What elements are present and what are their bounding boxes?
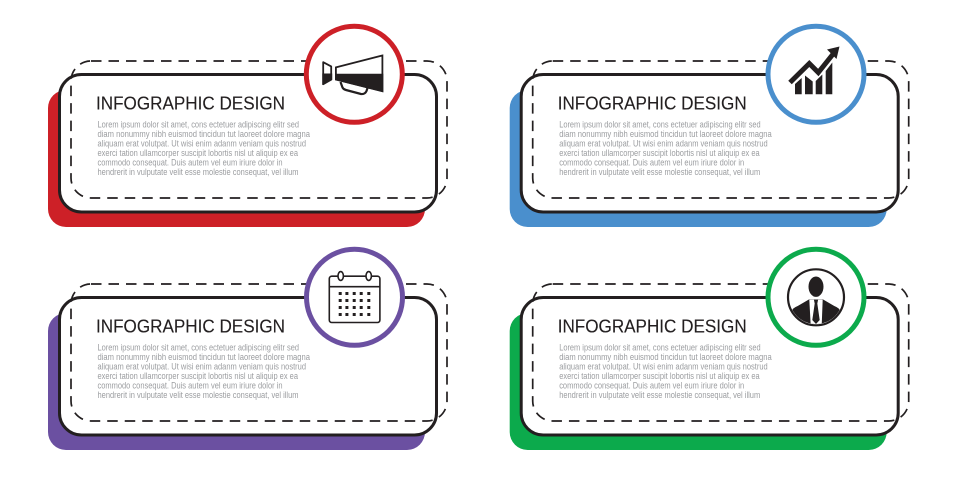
solid outlined box <box>60 298 436 435</box>
body text: commodo consequat. Duis autem vel eum iriure dolor in <box>559 380 744 390</box>
body text: commodo consequat. Duis autem vel eum iriure dolor in <box>98 380 283 390</box>
body text <box>98 120 310 177</box>
body text: Lorem ipsum dolor sit amet, cons ectetuer adipiscing elitr sed <box>559 120 761 130</box>
icon: calendar <box>329 272 380 322</box>
body text: exerci tation ullamcorper suscipit lobortis nisl ut aliquip ex ea <box>559 148 760 158</box>
panel: green businessman card <box>510 249 909 450</box>
body text: exerci tation ullamcorper suscipit lobortis nisl ut aliquip ex ea <box>98 371 298 381</box>
dashed outline <box>533 61 909 198</box>
body text: commodo consequat. Duis autem vel eum iriure dolor in <box>98 158 283 168</box>
green backing shape <box>510 313 887 450</box>
body text: Lorem ipsum dolor sit amet, cons ectetuer adipiscing elitr sed <box>559 342 761 352</box>
body text: commodo consequat. Duis autem vel eum iriure dolor in <box>559 158 744 168</box>
icon ring <box>306 249 402 345</box>
solid outlined box <box>521 298 898 435</box>
red backing shape <box>48 90 425 227</box>
heading: INFOGRAPHIC DESIGN <box>96 316 285 336</box>
body text: diam nonummy nibh euismod tincidun tut laoreet dolore magna <box>98 129 310 139</box>
icon ring <box>768 26 864 122</box>
body text: diam nonummy nibh euismod tincidun tut laoreet dolore magna <box>559 129 772 139</box>
body text: hendrerit in vulputate velit esse molestie consequat, vel illum <box>559 390 760 400</box>
solid outlined box <box>60 74 436 212</box>
body text: aliquam erat volutpat. Ut wisi enim adanm veniam quis nostrud <box>98 362 306 372</box>
body text: hendrerit in vulputate velit esse molestie consequat, vel illum <box>98 390 298 400</box>
body text: Lorem ipsum dolor sit amet, cons ectetuer adipiscing elitr sed <box>98 120 299 130</box>
dashed outline <box>71 61 447 198</box>
body text: hendrerit in vulputate velit esse molestie consequat, vel illum <box>559 167 760 177</box>
body text: aliquam erat volutpat. Ut wisi enim adanm veniam quis nostrud <box>98 138 306 148</box>
body text: Lorem ipsum dolor sit amet, cons ectetuer adipiscing elitr sed <box>98 342 299 352</box>
panel: purple calendar card <box>48 249 447 450</box>
body text: hendrerit in vulputate velit esse molestie consequat, vel illum <box>98 167 298 177</box>
purple backing shape <box>48 313 425 450</box>
panel: blue growth chart card <box>510 26 909 227</box>
body text: diam nonummy nibh euismod tincidun tut laoreet dolore magna <box>559 352 772 362</box>
icon ring <box>768 249 864 345</box>
body text <box>98 342 310 400</box>
icon: rising bar chart with arrow <box>790 46 840 94</box>
heading: INFOGRAPHIC DESIGN <box>96 92 285 114</box>
heading: INFOGRAPHIC DESIGN <box>558 92 747 114</box>
blue backing shape <box>510 90 887 227</box>
heading: INFOGRAPHIC DESIGN <box>558 316 747 336</box>
body text: aliquam erat volutpat. Ut wisi enim adanm veniam quis nostrud <box>559 138 768 148</box>
body text: exerci tation ullamcorper suscipit lobortis nisl ut aliquip ex ea <box>98 148 298 158</box>
panel: red megaphone card <box>48 26 447 227</box>
body text: aliquam erat volutpat. Ut wisi enim adanm veniam quis nostrud <box>559 362 768 372</box>
solid outlined box <box>521 74 898 212</box>
dashed outline <box>71 284 447 421</box>
icon: megaphone <box>322 56 383 94</box>
body text: exerci tation ullamcorper suscipit lobortis nisl ut aliquip ex ea <box>559 371 760 381</box>
body text: diam nonummy nibh euismod tincidun tut laoreet dolore magna <box>98 352 310 362</box>
body text <box>559 120 772 177</box>
icon ring <box>306 26 402 122</box>
body text <box>559 342 772 400</box>
icon: businessman portrait <box>788 269 844 325</box>
dashed outline <box>533 284 909 421</box>
